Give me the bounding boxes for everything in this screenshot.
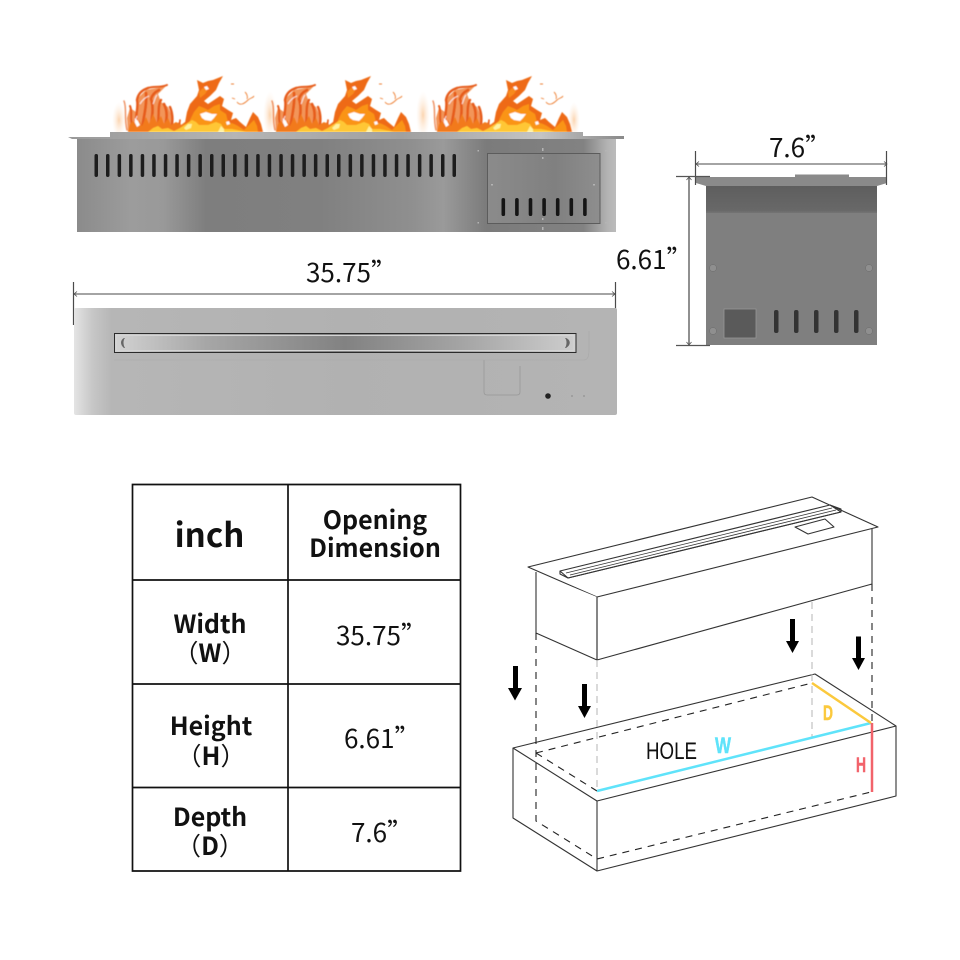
dimension: width 35.75 (74, 253, 616, 325)
label HOLE: HOLE (646, 738, 697, 765)
dark band under flange (706, 186, 877, 213)
rail on top (560, 505, 841, 578)
label W: W (715, 733, 731, 758)
end body (706, 183, 877, 345)
dimension: height 6.61: 6.61” (616, 240, 693, 277)
end vents (774, 310, 858, 333)
row label: height: （H） (177, 737, 245, 773)
flames: three clusters (112, 76, 580, 139)
depth line (812, 683, 871, 723)
arrow 2 (578, 684, 591, 718)
value: depth: 7.6” (351, 813, 413, 850)
bolts (710, 264, 872, 334)
row label: depth: （D） (176, 827, 244, 863)
arrow 3 (786, 619, 799, 653)
ventilation slots (94, 154, 456, 177)
stainless steel body (77, 137, 616, 232)
label D: D (823, 702, 833, 725)
row label: height: Height (170, 707, 253, 743)
dimension: depth 7.6: 7.6” (769, 128, 831, 165)
control pad (795, 519, 834, 534)
product side elevation with flames (68, 76, 624, 232)
end view of product (696, 174, 887, 345)
control panel outline (484, 360, 520, 395)
top plate (74, 308, 617, 415)
dashed guide lines (536, 584, 872, 859)
height line (871, 723, 873, 792)
row label: width: （W） (174, 634, 246, 670)
installation diagram (508, 497, 896, 871)
top plate (68, 132, 624, 139)
access panel (478, 148, 608, 230)
dimension table (132, 484, 460, 871)
header: opening dimension: Opening (323, 501, 427, 537)
value: height: 6.61” (344, 719, 421, 756)
square opening (724, 309, 756, 338)
dimension: width 35.75: 35.75” (306, 253, 397, 290)
indicator lights (545, 393, 585, 399)
arrow 4 (852, 636, 865, 670)
dimension: depth 7.6 (696, 128, 887, 185)
product top view (74, 308, 617, 415)
row label: width: Width (173, 605, 247, 641)
arrow 1 (508, 666, 522, 700)
cutout box (513, 674, 896, 871)
wireframe unit (528, 497, 878, 660)
row label: depth: Depth (173, 798, 247, 834)
dimension: height 6.61 (616, 176, 710, 346)
value: width: 35.75” (336, 616, 427, 653)
faint recess outline (114, 331, 589, 360)
label H: H (856, 754, 866, 777)
flame slot (114, 334, 576, 352)
flange (696, 174, 887, 186)
header: inch: inch (175, 509, 244, 557)
light dashed guide lines (597, 602, 812, 791)
header: opening dimension: Dimension (309, 529, 441, 565)
table grid (132, 484, 460, 871)
width line (597, 723, 871, 791)
